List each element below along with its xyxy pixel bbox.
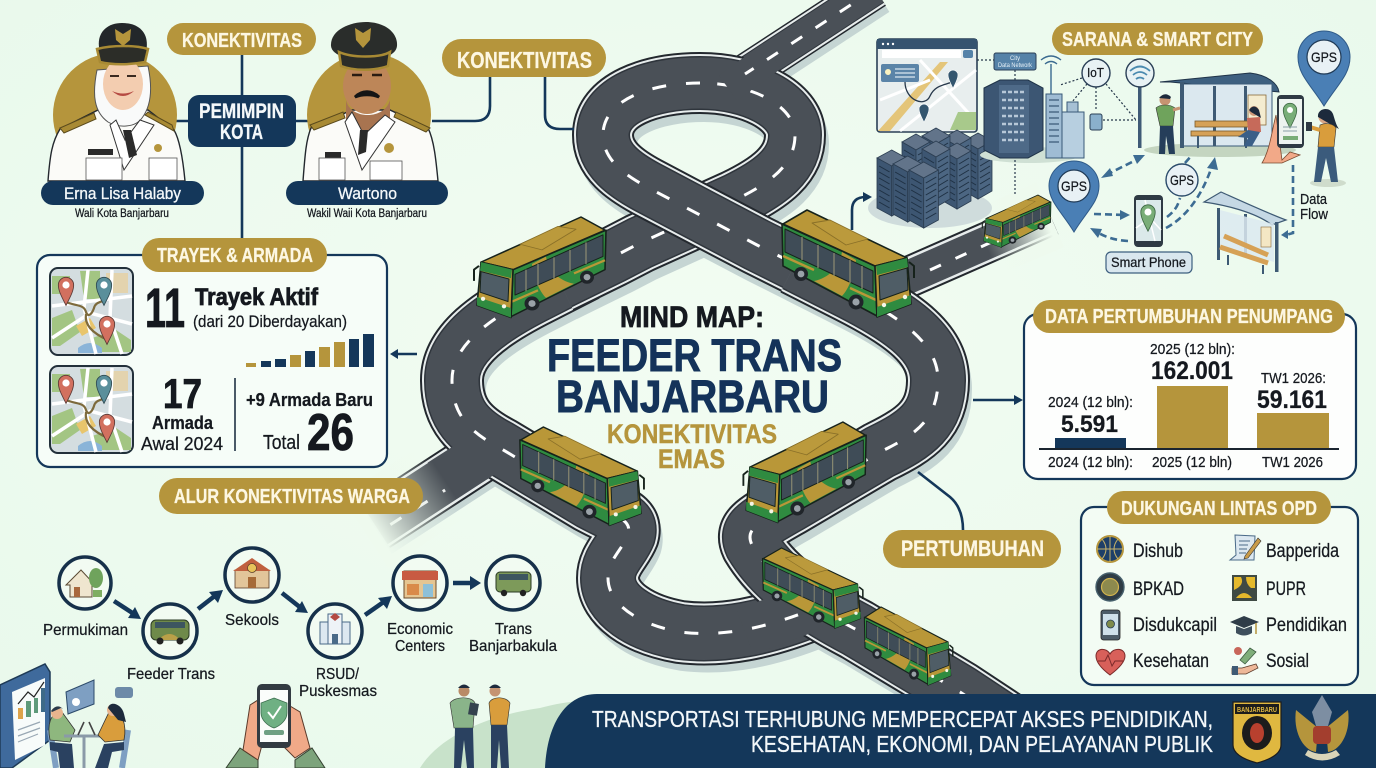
standing woman with phone [1306,109,1346,187]
connector lines [176,55,1023,530]
footer banner [545,694,1376,768]
stat: total 26: Total [263,432,300,454]
item: pupr [1232,575,1306,601]
node: sekools: Sekools [225,612,279,629]
illustration: two men talking [450,684,510,768]
box: pemimpin kota: KOTA [220,121,263,144]
item: kesehatan: Kesehatan [1133,651,1209,672]
item: dishub [1097,536,1183,562]
data tower and cloud: Data Network [998,63,1033,69]
axis labels: TW1 2026 [1262,454,1323,471]
item: bpkad [1096,573,1184,601]
item: pendidikan: Pendidikan [1266,615,1347,636]
bar TW1 2026: 59.161 [1257,386,1327,414]
box: pemimpin kota [188,95,296,147]
bar 2025: 162.001 [1151,357,1233,385]
bus stop with people [1144,73,1296,157]
item: pupr: PUPR [1266,579,1306,600]
smart phone [1134,195,1163,247]
smart city cluster [868,23,1350,274]
iot node [1060,59,1136,130]
data flow label: Flow [1300,206,1328,223]
bus: exit road first [763,548,863,628]
road network [365,0,1050,754]
node: trans banjarbakula: Banjarbakula [469,638,557,655]
browser map [877,39,977,132]
flow: citizen connectivity [43,548,557,700]
item: pendidikan [1230,615,1347,636]
node: sekools [225,548,279,629]
portrait: Erna Lisa Halaby [41,23,204,220]
pill: alur konektivitas warga [159,478,423,514]
GPS pin center [1049,161,1099,232]
data flow label: Data [1300,191,1328,208]
small shelter [1204,192,1286,274]
item: bapperida: Bapperida [1266,541,1339,562]
bus: exit road second [864,607,953,685]
phone in hand [1262,95,1304,163]
bar 2024: 2024 (12 bln): [1048,394,1133,411]
stat: 17 armada: Awal 2024 [141,434,223,454]
panel: trayek & armada [37,238,387,467]
illustration: tablet and two people at table [0,664,133,768]
role: Wali Kota Banjarbaru [75,208,169,220]
emblem: city shield: BANJARBARU [1237,707,1277,714]
box: pemimpin kota: PEMIMPIN [199,100,284,123]
item: sosial [1232,647,1309,675]
axis labels: 2025 (12 bln) [1152,454,1232,471]
node: permukiman [43,557,128,639]
icon: route map bottom [50,366,133,453]
bar 2025 [1150,341,1235,449]
panel pill: DUKUNGAN LINTAS OPD [1121,498,1317,520]
title block: FEEDER TRANS [547,330,842,381]
name pill: Wartono [338,184,397,203]
stat: 11 trayek: (dari 20 Diberdayakan) [193,312,347,331]
panel pill: TRAYEK & ARMADA [157,245,313,267]
footer text: TRANSPORTASI TERHUBUNG MEMPERCEPAT AKSES PENDIDIKAN, [592,706,1213,732]
item: kesehatan [1096,649,1209,675]
pill: sarana & smart city [1052,23,1263,55]
emblem: city shield [1233,702,1281,763]
GPS circle [1166,164,1198,196]
GPS pin top right [1298,31,1350,106]
flow arrows [114,576,481,619]
illustration: hands holding phone [226,684,325,768]
node: feeder trans: Feeder Trans [127,666,215,683]
data tower and cloud [977,53,1084,195]
data flow label [1300,191,1328,223]
item: dishub: Dishub [1133,541,1183,562]
GPS pin center: GPS [1061,178,1087,194]
bus: smart city road [982,195,1051,247]
bar TW1 2026 [1257,370,1329,449]
stat: total 26: 26 [307,404,354,462]
pill: alur konektivitas warga: ALUR KONEKTIVITAS WARGA [174,486,410,508]
title block: KONEKTIVITAS [607,419,777,449]
node: trans banjarbakula [469,556,557,655]
node: economic centers: Centers [395,638,445,655]
title block: MIND MAP: [620,301,764,334]
node: economic centers: Economic [387,621,453,638]
GPS circle: GPS [1170,172,1194,188]
emblem: garuda [1295,695,1349,760]
title block: EMAS [658,444,725,474]
iot node: IoT [1087,65,1104,80]
pill: pertumbuhan [883,530,1061,568]
name pill: Erna Lisa Halaby [64,184,181,203]
wifi pole [1126,59,1154,148]
stat: 11 trayek: Trayek Aktif [195,284,319,311]
bus: lower right [743,422,866,523]
node: rsud: Puskesmas [299,683,377,700]
node: permukiman: Permukiman [43,622,128,639]
stat: 17 armada [141,370,223,454]
stat: total 26: +9 Armada Baru [246,390,373,410]
pill: sarana & smart city: SARANA & SMART CITY [1062,29,1254,51]
hill: footer backdrop [420,700,610,768]
panel pill [1107,491,1331,524]
pill: konektivitas road: KONEKTIVITAS [457,47,592,73]
pill: konektivitas road [442,39,606,77]
item: disdukcapil: Disdukcapil [1133,615,1217,636]
stat: 17 armada: Armada [152,413,214,433]
footer text: KESEHATAN, EKONOMI, DAN PELAYANAN PUBLIK [751,731,1214,757]
panel pill [142,238,327,272]
panel pill [1033,300,1345,333]
panel: data pertumbuhan penumpang [1024,300,1356,479]
item: bpkad: BPKAD [1133,579,1184,600]
stat: 17 armada: 17 [163,370,202,417]
bus: top right [782,210,914,317]
bar 2024 [1048,394,1133,449]
axis labels [1048,454,1323,471]
item: bapperida [1230,535,1339,562]
bar 2025: 2025 (12 bln): [1150,341,1235,358]
bar 2024: 5.591 [1061,411,1118,438]
footer text [592,706,1214,757]
node: rsud: RSUD/ [316,666,359,683]
data tower and cloud: City [1010,56,1020,62]
node: economic centers [387,556,453,655]
stat: 11 trayek: 11 [145,276,185,339]
panel: dukungan lintas opd [1081,491,1358,685]
node: feeder trans [127,604,215,683]
title block [547,301,842,474]
item: disdukcapil [1101,610,1217,640]
bar TW1 2026: TW1 2026: [1261,370,1326,387]
name pill [286,181,448,205]
pill: konektivitas top [167,23,316,55]
stat: 11 trayek [145,276,347,339]
mini bar chart [246,334,374,367]
smart phone label: Smart Phone [1111,254,1186,270]
node: rsud [299,604,377,700]
dashed data arrows [1090,155,1293,241]
portrait: Wartono [286,22,448,220]
icon: route map top [50,268,133,355]
item: sosial: Sosial [1266,651,1309,672]
pill: pertumbuhan: PERTUMBUHAN [901,536,1044,561]
name pill [41,181,204,205]
stat: total 26 [246,390,373,462]
bus: top left [474,217,606,318]
node: trans banjarbakula: Trans [495,621,532,638]
role: Wakil Waii Kota Banjarbaru [307,208,427,220]
title block: BANJARBARU [556,371,829,422]
bus: lower left [520,427,644,525]
pill: konektivitas top: KONEKTIVITAS [182,30,302,52]
GPS pin top right: GPS [1311,49,1337,65]
axis labels: 2024 (12 bln): [1048,454,1133,471]
server racks [868,128,992,228]
